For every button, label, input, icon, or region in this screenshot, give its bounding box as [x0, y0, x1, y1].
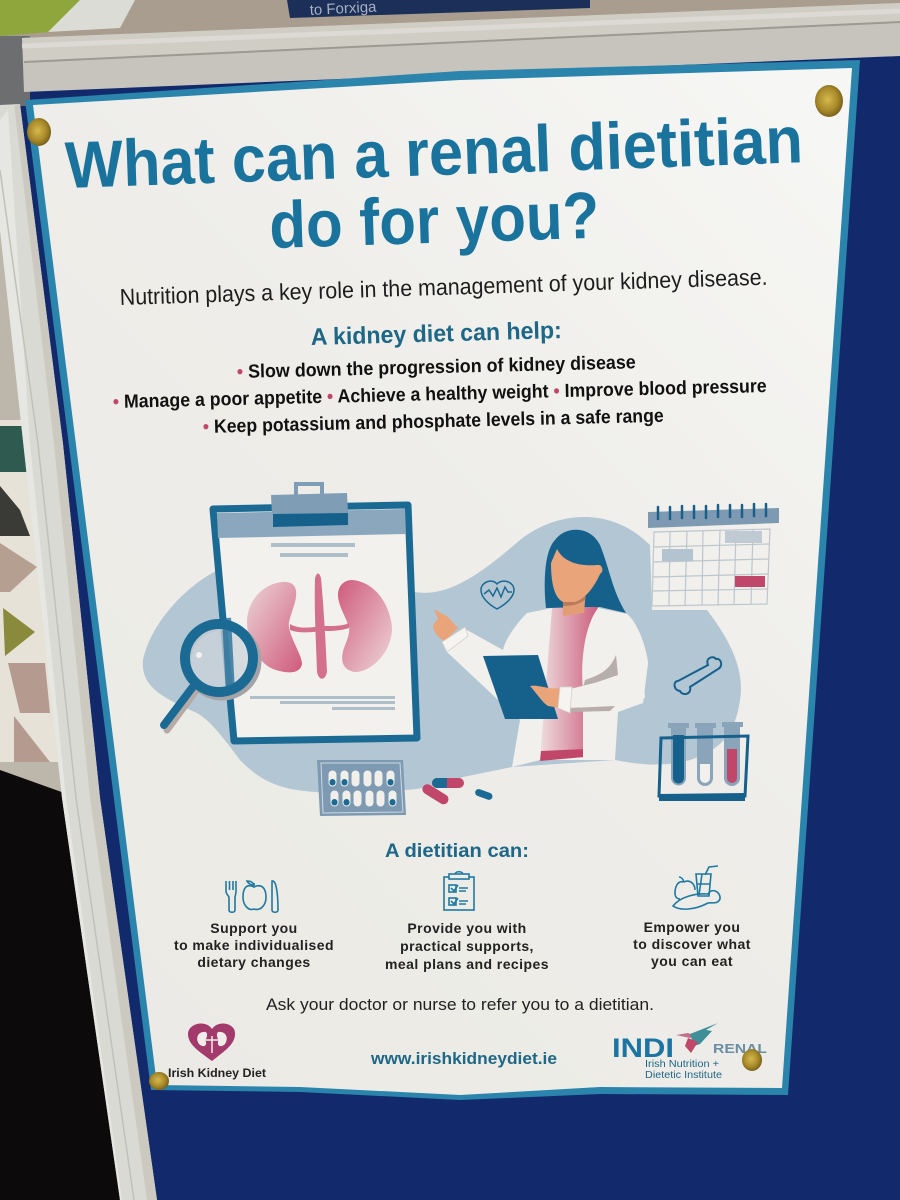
logo: Irish Kidney Diet	[168, 1024, 266, 1080]
doctor figure	[433, 530, 648, 767]
heading: a dietitian can: A dietitian can:	[385, 840, 529, 862]
logo: INDI Renal: RENAL	[713, 1042, 767, 1056]
logo: INDI Renal: Irish Nutrition +	[645, 1059, 719, 1070]
coat	[447, 608, 648, 767]
bullet list: • Slow down the progression of kidney disease	[237, 352, 636, 383]
title: What can a renal dietitian	[64, 102, 804, 202]
brass pins	[27, 85, 843, 1090]
provide text: practical supports,	[400, 938, 534, 954]
kidneys	[247, 574, 392, 679]
website: www.irishkidneydiet.ie	[370, 1050, 557, 1068]
top aluminium rail	[22, 3, 900, 92]
empower text: to discover what	[633, 936, 751, 952]
icon: fork apple knife	[226, 881, 278, 912]
poster: white paper	[33, 68, 852, 1095]
coat right panel	[582, 608, 648, 760]
empower text	[633, 919, 751, 969]
icon: bone	[674, 657, 721, 694]
face	[551, 549, 602, 602]
bullet list	[113, 352, 767, 438]
column: support you	[174, 881, 334, 970]
loose capsules	[420, 778, 493, 806]
logo: Irish Kidney Diet: Irish Kidney Diet	[168, 1068, 266, 1080]
pointing hand	[433, 609, 458, 641]
provide text: meal plans and recipes	[385, 956, 549, 972]
empower text: Empower you	[644, 919, 740, 935]
magnifying glass	[164, 618, 257, 730]
bullet list: • Manage a poor appetite • Achieve a healthy weight • Improve blood pressure	[113, 376, 767, 413]
logo: INDI Renal: INDI	[612, 1033, 674, 1063]
holding hand	[530, 686, 560, 708]
logo: INDI Renal	[612, 1023, 767, 1081]
left aluminium rail	[0, 104, 157, 1200]
bullet list: • Keep potassium and phosphate levels in a safe range	[203, 406, 664, 438]
title	[64, 102, 804, 262]
shirt	[540, 607, 598, 760]
column: provide you with	[385, 872, 549, 972]
title: do for you?	[268, 178, 600, 262]
cuff	[558, 687, 572, 713]
support text: to make individualised	[174, 937, 334, 953]
support text	[174, 920, 334, 970]
intro sentence: Nutrition plays a key role in the management of your kidney disease.	[119, 264, 768, 310]
icon: checklist	[444, 872, 474, 910]
forearm	[570, 668, 645, 708]
sleeve cuff	[442, 627, 468, 652]
illustration background blob	[143, 517, 741, 793]
quilt on the wall	[0, 420, 60, 762]
test tubes in rack	[659, 722, 748, 801]
referral sentence: Ask your doctor or nurse to refer you to a dietitian.	[266, 996, 654, 1014]
blister pack of pills	[317, 760, 406, 816]
clipboard with kidneys	[213, 484, 417, 741]
column: empower you	[633, 866, 751, 969]
logo: INDI Renal: Dietetic Institute	[645, 1070, 722, 1081]
provide text	[385, 920, 549, 972]
empower text: you can eat	[651, 953, 733, 969]
provide text: Provide you with	[407, 920, 527, 936]
hair	[545, 530, 626, 613]
heading: a kidney diet can help: A kidney diet can help:	[310, 317, 562, 351]
support text: dietary changes	[197, 954, 311, 970]
calendar	[648, 504, 779, 606]
tablet	[483, 655, 558, 719]
support text: Support you	[210, 920, 298, 936]
icon: heartbeat	[481, 581, 514, 609]
neck	[563, 590, 586, 616]
icon: fruit and carrot	[673, 866, 720, 909]
